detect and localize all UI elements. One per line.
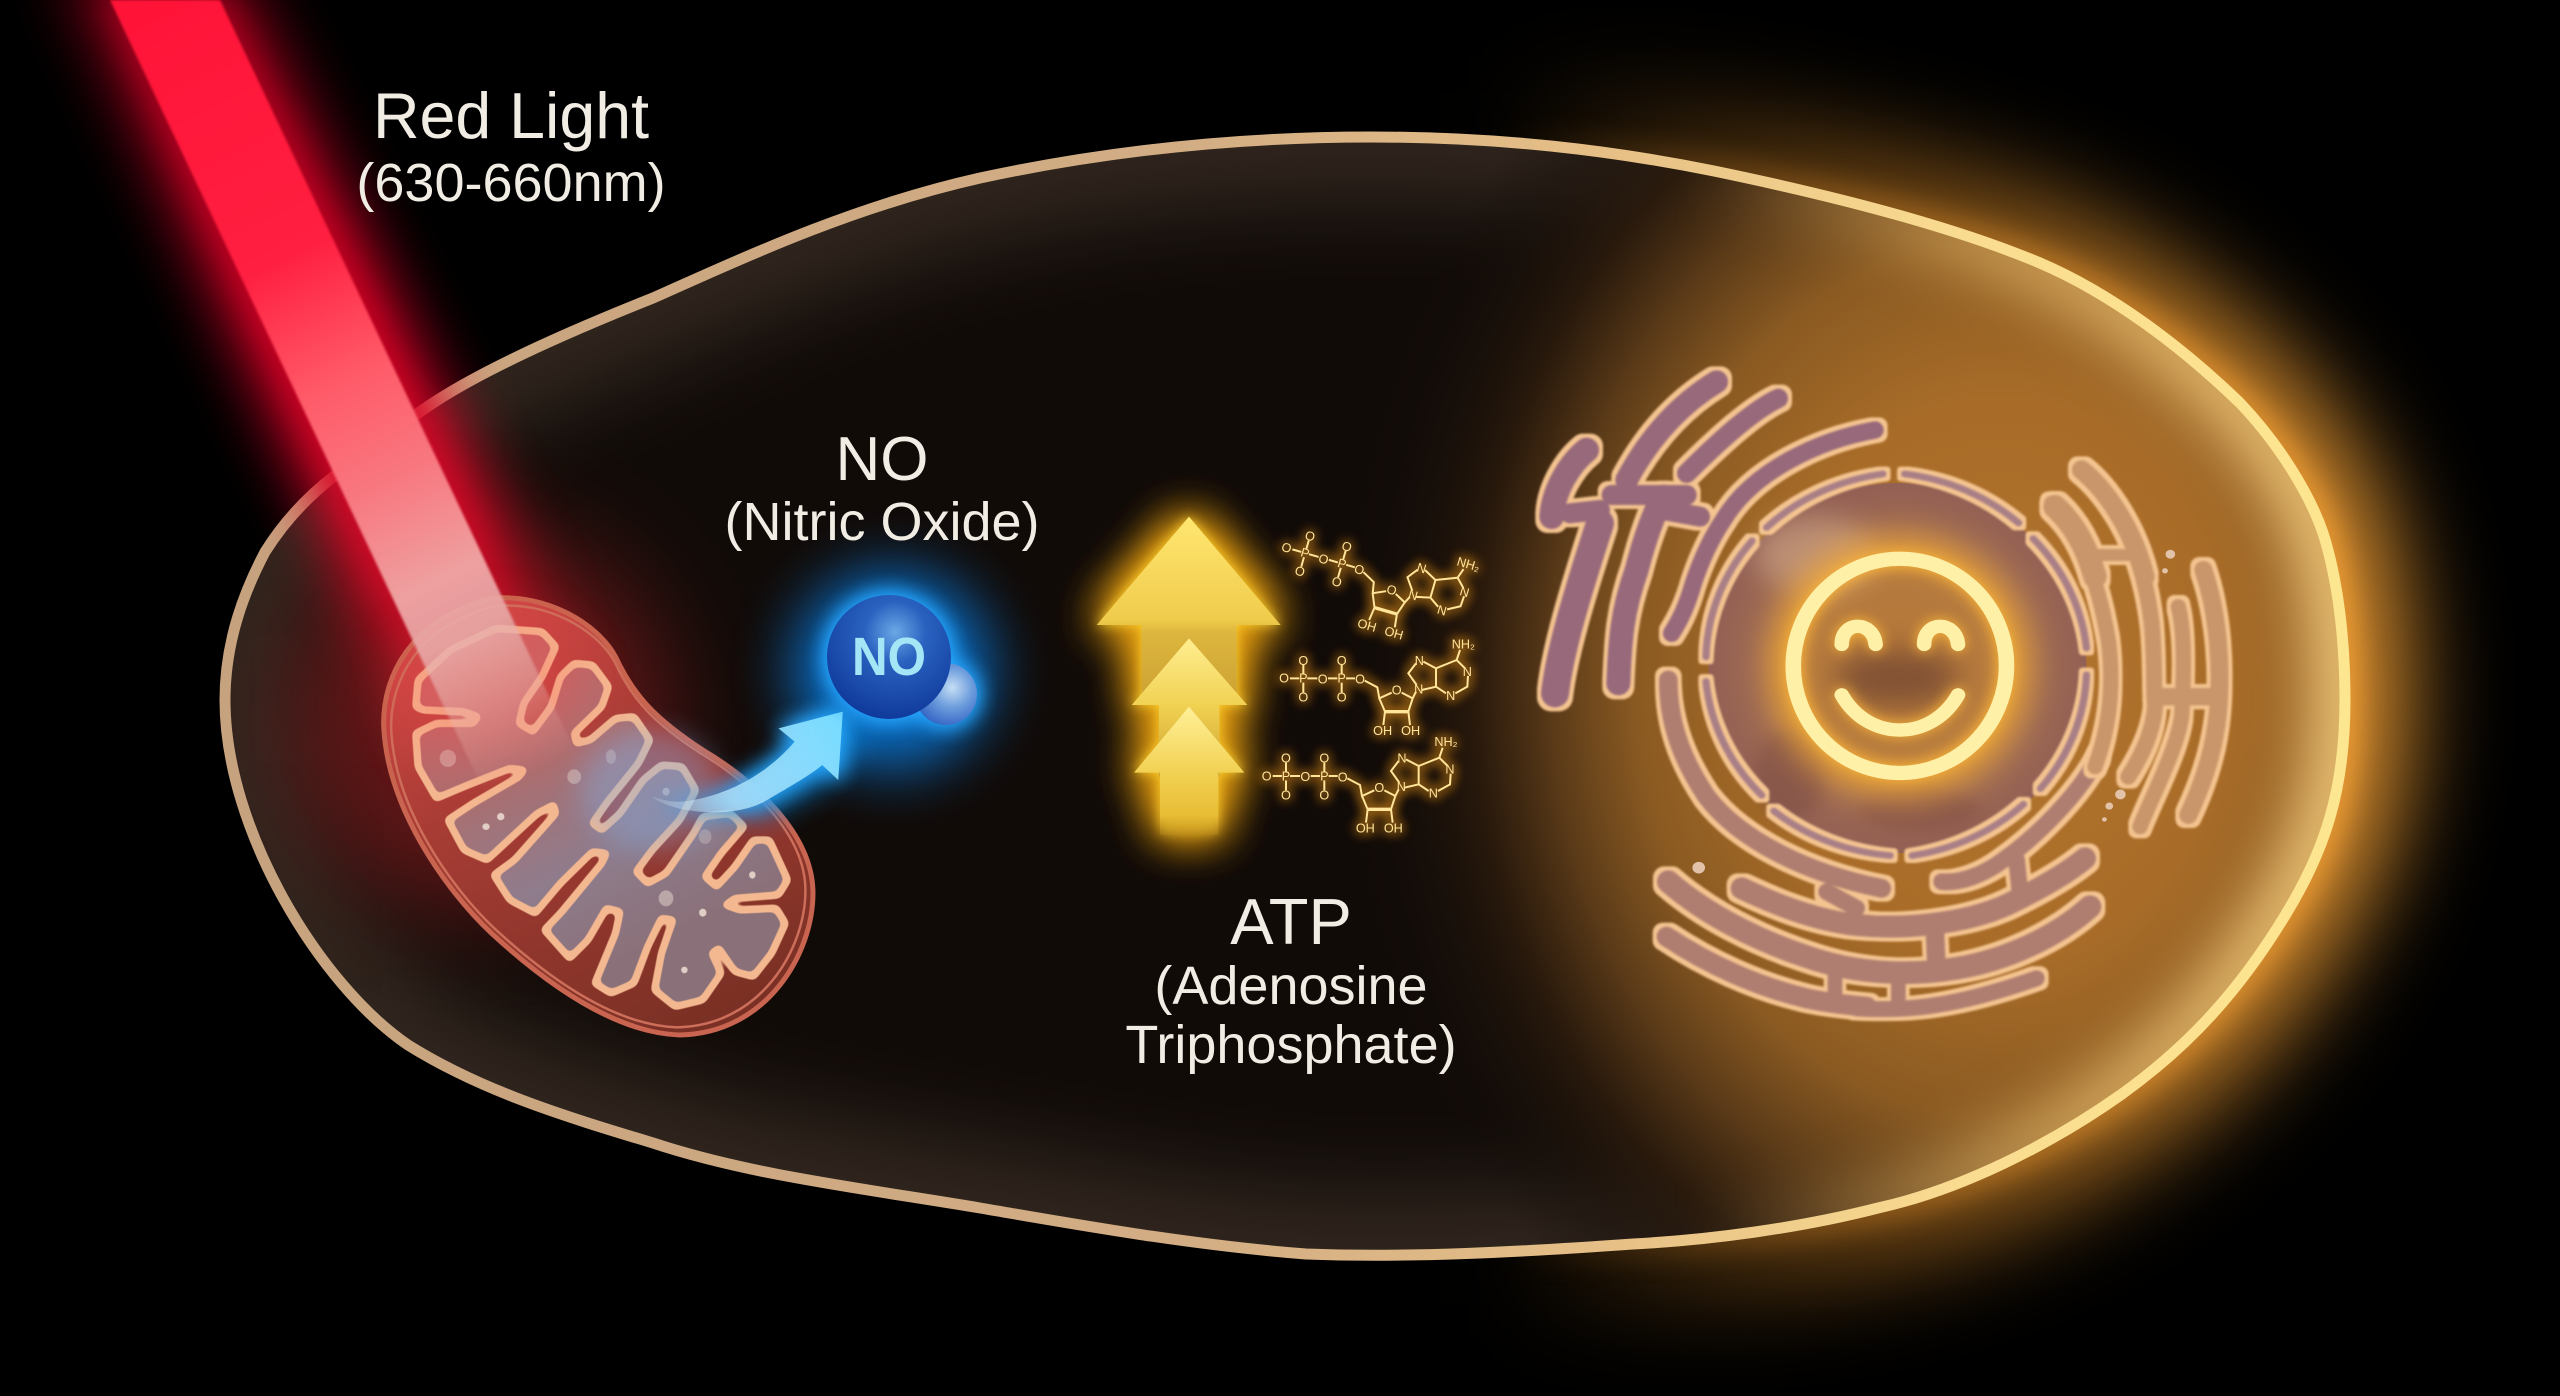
ATP molecule top: OH — [1383, 624, 1405, 643]
ATP molecule bottom: N — [1429, 787, 1438, 801]
ATP molecule middle — [1279, 637, 1475, 738]
endoplasmic reticulum: upper left cluster — [1552, 382, 1875, 693]
ATP molecule bottom: O — [1319, 752, 1329, 766]
endoplasmic reticulum: right cluster — [2052, 470, 2220, 827]
blue tint over mitochondrion — [580, 730, 720, 850]
label: ATP: ATP — [1230, 885, 1352, 958]
ATP molecule bottom: O — [1281, 752, 1291, 766]
ATP molecule middle: N — [1463, 665, 1472, 679]
ATP molecule top: O — [1280, 540, 1293, 556]
ATP molecule middle: O — [1355, 673, 1365, 687]
nucleus pale patch — [1755, 517, 1875, 593]
nuclear envelope segments — [1706, 474, 2086, 856]
ATP molecule middle: P — [1337, 672, 1346, 686]
ATP molecule middle: O — [1337, 654, 1347, 668]
arrow: mitochondrion to NO — [652, 712, 843, 812]
label: red light: Red Light — [373, 80, 649, 152]
ATP molecule top: O — [1330, 574, 1343, 590]
ATP molecule top: N — [1436, 603, 1448, 619]
molecule symbol: NO — [852, 627, 926, 687]
icon: golden up arrows — [1097, 517, 1281, 835]
red light beam — [110, 0, 598, 800]
ATP molecule bottom: P — [1320, 769, 1329, 783]
ATP molecule top: O — [1317, 551, 1330, 567]
label: nitric oxide: (Nitric Oxide) — [724, 492, 1040, 552]
ATP molecule bottom: O — [1262, 769, 1272, 783]
ATP molecule bottom — [1262, 735, 1458, 836]
ATP molecule bottom: NH₂ — [1434, 735, 1458, 749]
ATP molecule top: P — [1299, 545, 1311, 561]
ATP molecule top: N — [1415, 560, 1428, 576]
ATP molecule middle: O — [1318, 672, 1328, 686]
red beam halo — [110, 0, 598, 800]
ATP molecule top: N — [1458, 584, 1471, 600]
ATP molecule bottom: N — [1397, 752, 1407, 766]
label: nitric oxide — [724, 425, 1040, 552]
ATP molecule top: O — [1303, 528, 1317, 545]
nucleus — [1708, 483, 2086, 853]
cristae outline — [416, 628, 788, 1007]
ATP molecule bottom: OH — [1384, 822, 1403, 836]
ATP molecule top: N — [1407, 587, 1419, 603]
ATP molecule top: NH₂ — [1455, 555, 1481, 574]
ATP molecule middle: NH₂ — [1452, 637, 1475, 651]
mitochondrion — [384, 598, 813, 1035]
ATP molecule bottom: O — [1374, 781, 1384, 795]
ATP molecule bottom: N — [1397, 780, 1406, 794]
ATP molecule bottom: O — [1338, 770, 1348, 784]
ATP molecule top: OH — [1356, 616, 1378, 635]
nucleus dark patch lower — [1860, 788, 1980, 832]
ATP molecule middle: O — [1337, 691, 1347, 705]
label: red light — [356, 80, 666, 213]
label: red light: (630-660nm) — [356, 153, 666, 213]
ATP molecule bottom: O — [1281, 788, 1291, 802]
matrix particles — [440, 749, 756, 973]
ATP molecule middle: P — [1299, 672, 1308, 686]
ATP molecule top: P — [1336, 556, 1348, 572]
ATP molecule bottom: P — [1282, 769, 1290, 783]
label: ATP — [1125, 885, 1457, 1075]
icon: NO molecule — [827, 595, 977, 725]
label: nitric oxide: NO — [836, 425, 928, 494]
ATP molecule middle: N — [1415, 654, 1424, 668]
panel: cell body — [225, 100, 2360, 1280]
smiley outer glow — [1782, 548, 2018, 784]
NO glow — [740, 570, 992, 800]
ATP molecule middle: O — [1298, 691, 1308, 705]
ATP molecule middle: O — [1279, 672, 1289, 686]
red haze over mitochondrion — [400, 620, 580, 760]
ATP molecule top: O — [1353, 562, 1366, 578]
endoplasmic reticulum: bottom cluster — [1667, 680, 2098, 1009]
ATP molecule middle: N — [1446, 689, 1455, 703]
ATP molecule bottom: O — [1319, 788, 1329, 802]
ATP molecule middle: N — [1414, 682, 1423, 696]
ATP molecule top: O — [1340, 539, 1354, 555]
vesicles — [1692, 550, 2175, 873]
ATP molecule bottom: OH — [1356, 822, 1375, 836]
mitochondrion matrix with cristae — [416, 628, 788, 1007]
smiley inner shade — [1835, 650, 1959, 706]
ATP molecule structures — [1262, 507, 1481, 836]
ATP molecule bottom: O — [1300, 770, 1310, 784]
icon: smiley face — [1793, 559, 2007, 773]
ATP molecule top: O — [1385, 582, 1398, 598]
cell outer glow — [225, 137, 2345, 1255]
ATP molecule middle: OH — [1373, 724, 1392, 738]
ATP molecule top: O — [1293, 564, 1307, 580]
label: ATP: Triphosphate) — [1125, 1015, 1457, 1075]
ATP molecule middle: OH — [1401, 724, 1420, 738]
ATP molecule middle: O — [1392, 683, 1402, 697]
ATP molecule top — [1265, 507, 1481, 658]
label: ATP: (Adenosine — [1154, 956, 1428, 1016]
ATP molecule middle: O — [1298, 654, 1308, 668]
mitochondrion outer membrane — [384, 598, 813, 1035]
ATP molecule bottom: N — [1445, 763, 1455, 777]
nucleus dark patch — [1755, 730, 1825, 820]
